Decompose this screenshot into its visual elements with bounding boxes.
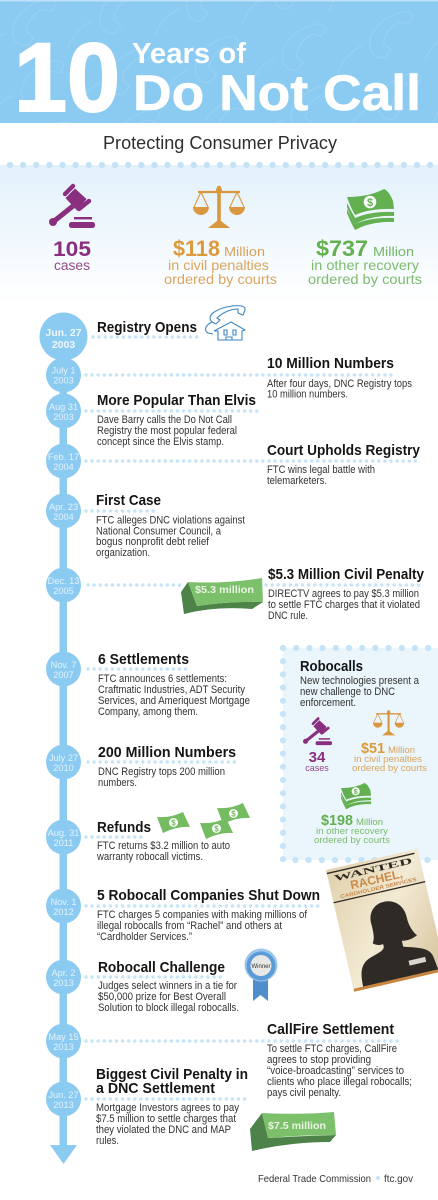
stat: other recovery: in other recovery	[311, 257, 419, 273]
event: Aug. 31 2011 Refunds: Aug. 31	[48, 828, 79, 838]
stat: cases: 105	[53, 238, 91, 261]
stat: $198 million	[314, 783, 390, 845]
event: Apr. 2 2013 Robocall Challenge: $50,000 prize for Best Overall	[98, 991, 226, 1003]
event: Aug. 31 2011 Refunds: Refunds	[97, 819, 151, 836]
stat: $198 million: ordered by courts	[314, 835, 390, 845]
title number: 10	[14, 23, 120, 132]
stat: 34 cases	[303, 719, 332, 773]
stat: other recovery: Million	[373, 244, 414, 259]
event: Aug 31 2003 More Popular Than Elvis: Aug 31	[49, 402, 78, 412]
stat: other recovery	[308, 189, 422, 287]
event: July 1 2003 10 Million Numbers: 10 Million Numbers	[267, 355, 394, 372]
event: Apr. 23 2004 First Case: National Consumer Council, a	[96, 526, 221, 538]
footer: ftc.gov	[384, 1173, 414, 1185]
stat: other recovery: ordered by courts	[308, 271, 422, 287]
event: Nov. 7 2007 6 Settlements	[46, 651, 250, 718]
stat: other recovery: $737	[316, 236, 368, 261]
header banner	[0, 0, 438, 132]
event: Jun. 27 2013 Biggest Civil Penalty: they violated the DNC and MAP	[96, 1124, 231, 1136]
icon: flying dollar bills	[157, 803, 250, 839]
event: Jun. 27 2013 Biggest Civil Penalty: 2013	[53, 1100, 74, 1110]
event: Dec. 13 2005 $5.3 Million Civil Penalty: 2005	[53, 586, 74, 596]
money banner: $7.5 million: $7.5 million	[268, 1120, 326, 1132]
icon: winner ribbon: Winner	[251, 964, 271, 970]
event: May 15 2013 CallFire Settlement: To settle FTC charges, CallFire	[267, 1043, 397, 1055]
event: July 1 2003 10 Million Numbers: After four days, DNC Registry tops	[267, 378, 412, 390]
event: May 15 2013 CallFire Settlement: 2013	[53, 1042, 74, 1052]
money banner: $5.3 million	[181, 578, 263, 614]
event: Apr. 2 2013 Robocall Challenge	[46, 948, 278, 1014]
wanted poster: CARDHOLDER SERVICES	[340, 877, 418, 900]
event: Feb. 17 2004 Court Upholds Registry: Court Upholds Registry	[267, 442, 421, 459]
event: Apr. 23 2004 First Case: Apr. 23	[49, 502, 78, 512]
event: July 27 2010 200 Million Numbers: 200 Million Numbers	[98, 744, 236, 761]
event: Apr. 23 2004 First Case	[46, 492, 245, 559]
event: Apr. 23 2004 First Case: bogus nonprofit debt relief	[96, 536, 209, 548]
stat: civil penalties: $118	[173, 236, 220, 261]
event: Jun. 27 2003 Registry Opens: Jun. 27	[45, 327, 82, 339]
event: Jun. 27 2013 Biggest Civil Penalty: Biggest Civil Penalty in	[96, 1066, 248, 1083]
event: July 1 2003 10 Million Numbers	[46, 355, 412, 400]
icon: phone and house	[205, 306, 245, 340]
event: July 27 2010 200 Million Numbers: numbers.	[98, 777, 137, 789]
silhouette	[346, 893, 438, 987]
timeline line and arrow	[50, 336, 77, 1164]
wanted poster	[326, 849, 438, 992]
event: Aug 31 2003 More Popular Than Elvis: 2003	[53, 412, 74, 422]
event: Nov. 7 2007 6 Settlements: Services, and Ameriquest Mortgage	[98, 695, 250, 707]
robocalls text: enforcement.	[300, 697, 356, 709]
event: Aug 31 2003 More Popular Than Elvis: More Popular Than Elvis	[97, 392, 256, 409]
event: Jun. 27 2013 Biggest Civil Penalty: rules.	[96, 1135, 119, 1147]
event: Nov. 1 2012 5 Robocall Companies Shut Down: “Cardholder Services.”	[97, 931, 192, 943]
money banner: $5.3 million: $5.3 million	[195, 584, 254, 596]
event: Feb. 17 2004 Court Upholds Registry: telemarketers.	[267, 475, 327, 487]
robocalls heading: Robocalls	[300, 658, 363, 675]
event: Feb. 17 2004 Court Upholds Registry	[46, 442, 421, 487]
icon: gavel	[49, 186, 95, 228]
event: Jun. 27 2003 Registry Opens: Registry Opens	[97, 319, 197, 336]
event: Apr. 23 2004 First Case: FTC alleges DNC violations against	[96, 514, 245, 526]
event: July 27 2010 200 Million Numbers: July 27	[49, 753, 78, 763]
event: Dec. 13 2005 $5.3 Million Civil Penalty	[46, 566, 425, 622]
event: Jun. 27 2013 Biggest Civil Penalty: Jun. 27	[48, 1090, 79, 1100]
event: Nov. 7 2007 6 Settlements: 6 Settlements	[98, 651, 189, 668]
event: Dec. 13 2005 $5.3 Million Civil Penalty: DIRECTV agrees to pay $5.3 million	[268, 588, 419, 600]
event: Feb. 17 2004 Court Upholds Registry: FTC wins legal battle with	[267, 464, 375, 476]
event: Jun. 27 2003 Registry Opens: 2003	[52, 339, 75, 351]
event: Aug. 31 2011 Refunds: warranty robocall victims.	[96, 851, 203, 863]
panel: robocalls	[283, 648, 438, 860]
wanted poster: RACHEL,	[349, 867, 404, 892]
robocalls text: new challenge to DNC	[300, 686, 395, 698]
event: Aug 31 2003 More Popular Than Elvis	[46, 392, 257, 448]
event: Jun. 27 2013 Biggest Civil Penalty: a DNC Settlement	[96, 1080, 215, 1097]
stat: 34 cases: cases	[305, 763, 329, 773]
subtitle: Protecting Consumer Privacy	[103, 132, 338, 153]
event: May 15 2013 CallFire Settlement: clients who place illegal robocalls;	[267, 1076, 412, 1088]
stat: $51 million	[352, 710, 427, 773]
icon: winner ribbon	[244, 948, 278, 1001]
event: Nov. 1 2012 5 Robocall Companies Shut Down	[46, 887, 320, 943]
title line one: Years of	[132, 38, 246, 70]
event: Dec. 13 2005 $5.3 Million Civil Penalty: $5.3 Million Civil Penalty	[268, 566, 425, 583]
icon: scales	[193, 186, 245, 228]
event: Aug. 31 2011 Refunds	[46, 803, 250, 863]
stat: 34 cases: 34	[309, 749, 326, 766]
stat: $51 million: $51	[361, 741, 385, 757]
stat: $51 million: Million	[388, 745, 415, 755]
event: Nov. 1 2012 5 Robocall Companies Shut Down: Nov. 1	[51, 897, 76, 907]
event: July 1 2003 10 Million Numbers: 2003	[53, 376, 74, 386]
event: Nov. 1 2012 5 Robocall Companies Shut Down: 5 Robocall Companies Shut Down	[97, 887, 320, 904]
stat: civil penalties	[164, 186, 277, 287]
event: Apr. 23 2004 First Case: First Case	[96, 492, 161, 509]
event: Feb. 17 2004 Court Upholds Registry: Feb. 17	[48, 452, 79, 462]
event: Dec. 13 2005 $5.3 Million Civil Penalty: to settle FTC charges that it violated	[268, 599, 420, 611]
event: May 15 2013 CallFire Settlement: “voice-broadcasting” services to	[267, 1065, 404, 1077]
title line two: Do Not Call	[133, 65, 421, 121]
event: Aug. 31 2011 Refunds: FTC returns $3.2 million to auto	[97, 840, 230, 852]
dotted divider	[10, 162, 432, 168]
event: Aug 31 2003 More Popular Than Elvis: concept since the Elvis stamp.	[97, 436, 224, 448]
event: July 1 2003 10 Million Numbers: July 1	[51, 366, 76, 376]
stat: $51 million: ordered by courts	[352, 763, 427, 773]
event: Apr. 2 2013 Robocall Challenge: Judges select winners in a tie for	[98, 980, 237, 992]
event: Apr. 2 2013 Robocall Challenge: Robocall Challenge	[98, 959, 225, 976]
money banner: $7.5 million	[250, 1112, 336, 1151]
event: Apr. 2 2013 Robocall Challenge: Apr. 2	[51, 968, 76, 978]
event: May 15 2013 CallFire Settlement: CallFire Settlement	[267, 1021, 394, 1038]
event: Apr. 23 2004 First Case: organization.	[96, 547, 150, 559]
event: Aug. 31 2011 Refunds: 2011	[54, 838, 73, 848]
event: Nov. 7 2007 6 Settlements: 2007	[53, 670, 74, 680]
event: Nov. 1 2012 5 Robocall Companies Shut Down: FTC charges 5 companies with making millions of	[97, 909, 307, 921]
event: Feb. 17 2004 Court Upholds Registry: 2004	[53, 462, 74, 472]
event: July 1 2003 10 Million Numbers: 10 million numbers.	[267, 388, 348, 400]
robocalls text: New technologies present a	[300, 675, 419, 687]
stat: $198 million: Million	[356, 817, 383, 827]
stat: cases: cases	[54, 258, 90, 273]
event: May 15 2013 CallFire Settlement: May 15	[48, 1032, 79, 1042]
event: July 27 2010 200 Million Numbers	[46, 744, 236, 789]
icon: money stack	[347, 189, 394, 230]
event: July 27 2010 200 Million Numbers: 2010	[53, 763, 74, 773]
event: Aug 31 2003 More Popular Than Elvis: Dave Barry calls the Do Not Call	[97, 414, 232, 426]
event: Nov. 1 2012 5 Robocall Companies Shut Down: 2012	[53, 907, 74, 917]
event: Apr. 23 2004 First Case: 2004	[53, 512, 74, 522]
event: Nov. 7 2007 6 Settlements: Nov. 7	[51, 660, 76, 670]
stat: $198 million: in other recovery	[316, 826, 388, 836]
event: Apr. 2 2013 Robocall Challenge: 2013	[53, 978, 74, 988]
robocalls text	[300, 675, 419, 709]
event: May 15 2013 CallFire Settlement	[46, 1021, 412, 1099]
event: Jun. 27 2013 Biggest Civil Penalty: $7.5 million to settle charges that	[96, 1113, 236, 1125]
stat: $51 million: in civil penalties	[354, 754, 422, 764]
event: Dec. 13 2005 $5.3 Million Civil Penalty: DNC rule.	[268, 610, 308, 622]
event: July 27 2010 200 Million Numbers: DNC Registry tops 200 million	[98, 766, 225, 778]
wanted poster: WANTED	[333, 855, 414, 883]
stat: civil penalties: Million	[224, 244, 265, 259]
panel: fading background	[0, 165, 438, 305]
event: Jun. 27 2013 Biggest Civil Penalty: Mortgage Investors agrees to pay	[96, 1102, 240, 1114]
event: May 15 2013 CallFire Settlement: agrees to stop providing	[267, 1054, 371, 1066]
event: Nov. 7 2007 6 Settlements: FTC announces 6 settlements:	[98, 673, 227, 685]
stat: cases	[49, 186, 95, 273]
stat: civil penalties: ordered by courts	[164, 271, 277, 287]
event: Nov. 7 2007 6 Settlements: Craftmatic Industries, ADT Security	[98, 684, 246, 696]
footer: Federal Trade Commission	[258, 1173, 371, 1185]
event: May 15 2013 CallFire Settlement: pays civil penalty.	[267, 1087, 341, 1099]
event: Apr. 2 2013 Robocall Challenge: Solution to block illegal robocalls.	[98, 1002, 239, 1014]
event: Dec. 13 2005 $5.3 Million Civil Penalty: Dec. 13	[48, 576, 79, 586]
event: Jun. 27 2013 Biggest Civil Penalty	[46, 1066, 336, 1151]
event: Aug 31 2003 More Popular Than Elvis: Registry the most popular federal	[97, 425, 237, 437]
stat: $198 million: $198	[321, 813, 353, 829]
event: Jun. 27 2003 Registry Opens	[40, 306, 245, 360]
stat: civil penalties: in civil penalties	[168, 257, 269, 273]
event: Nov. 7 2007 6 Settlements: Company, among them.	[98, 706, 198, 718]
event: Nov. 1 2012 5 Robocall Companies Shut Down: illegal robocalls from “Rachel” and others at	[97, 920, 282, 932]
